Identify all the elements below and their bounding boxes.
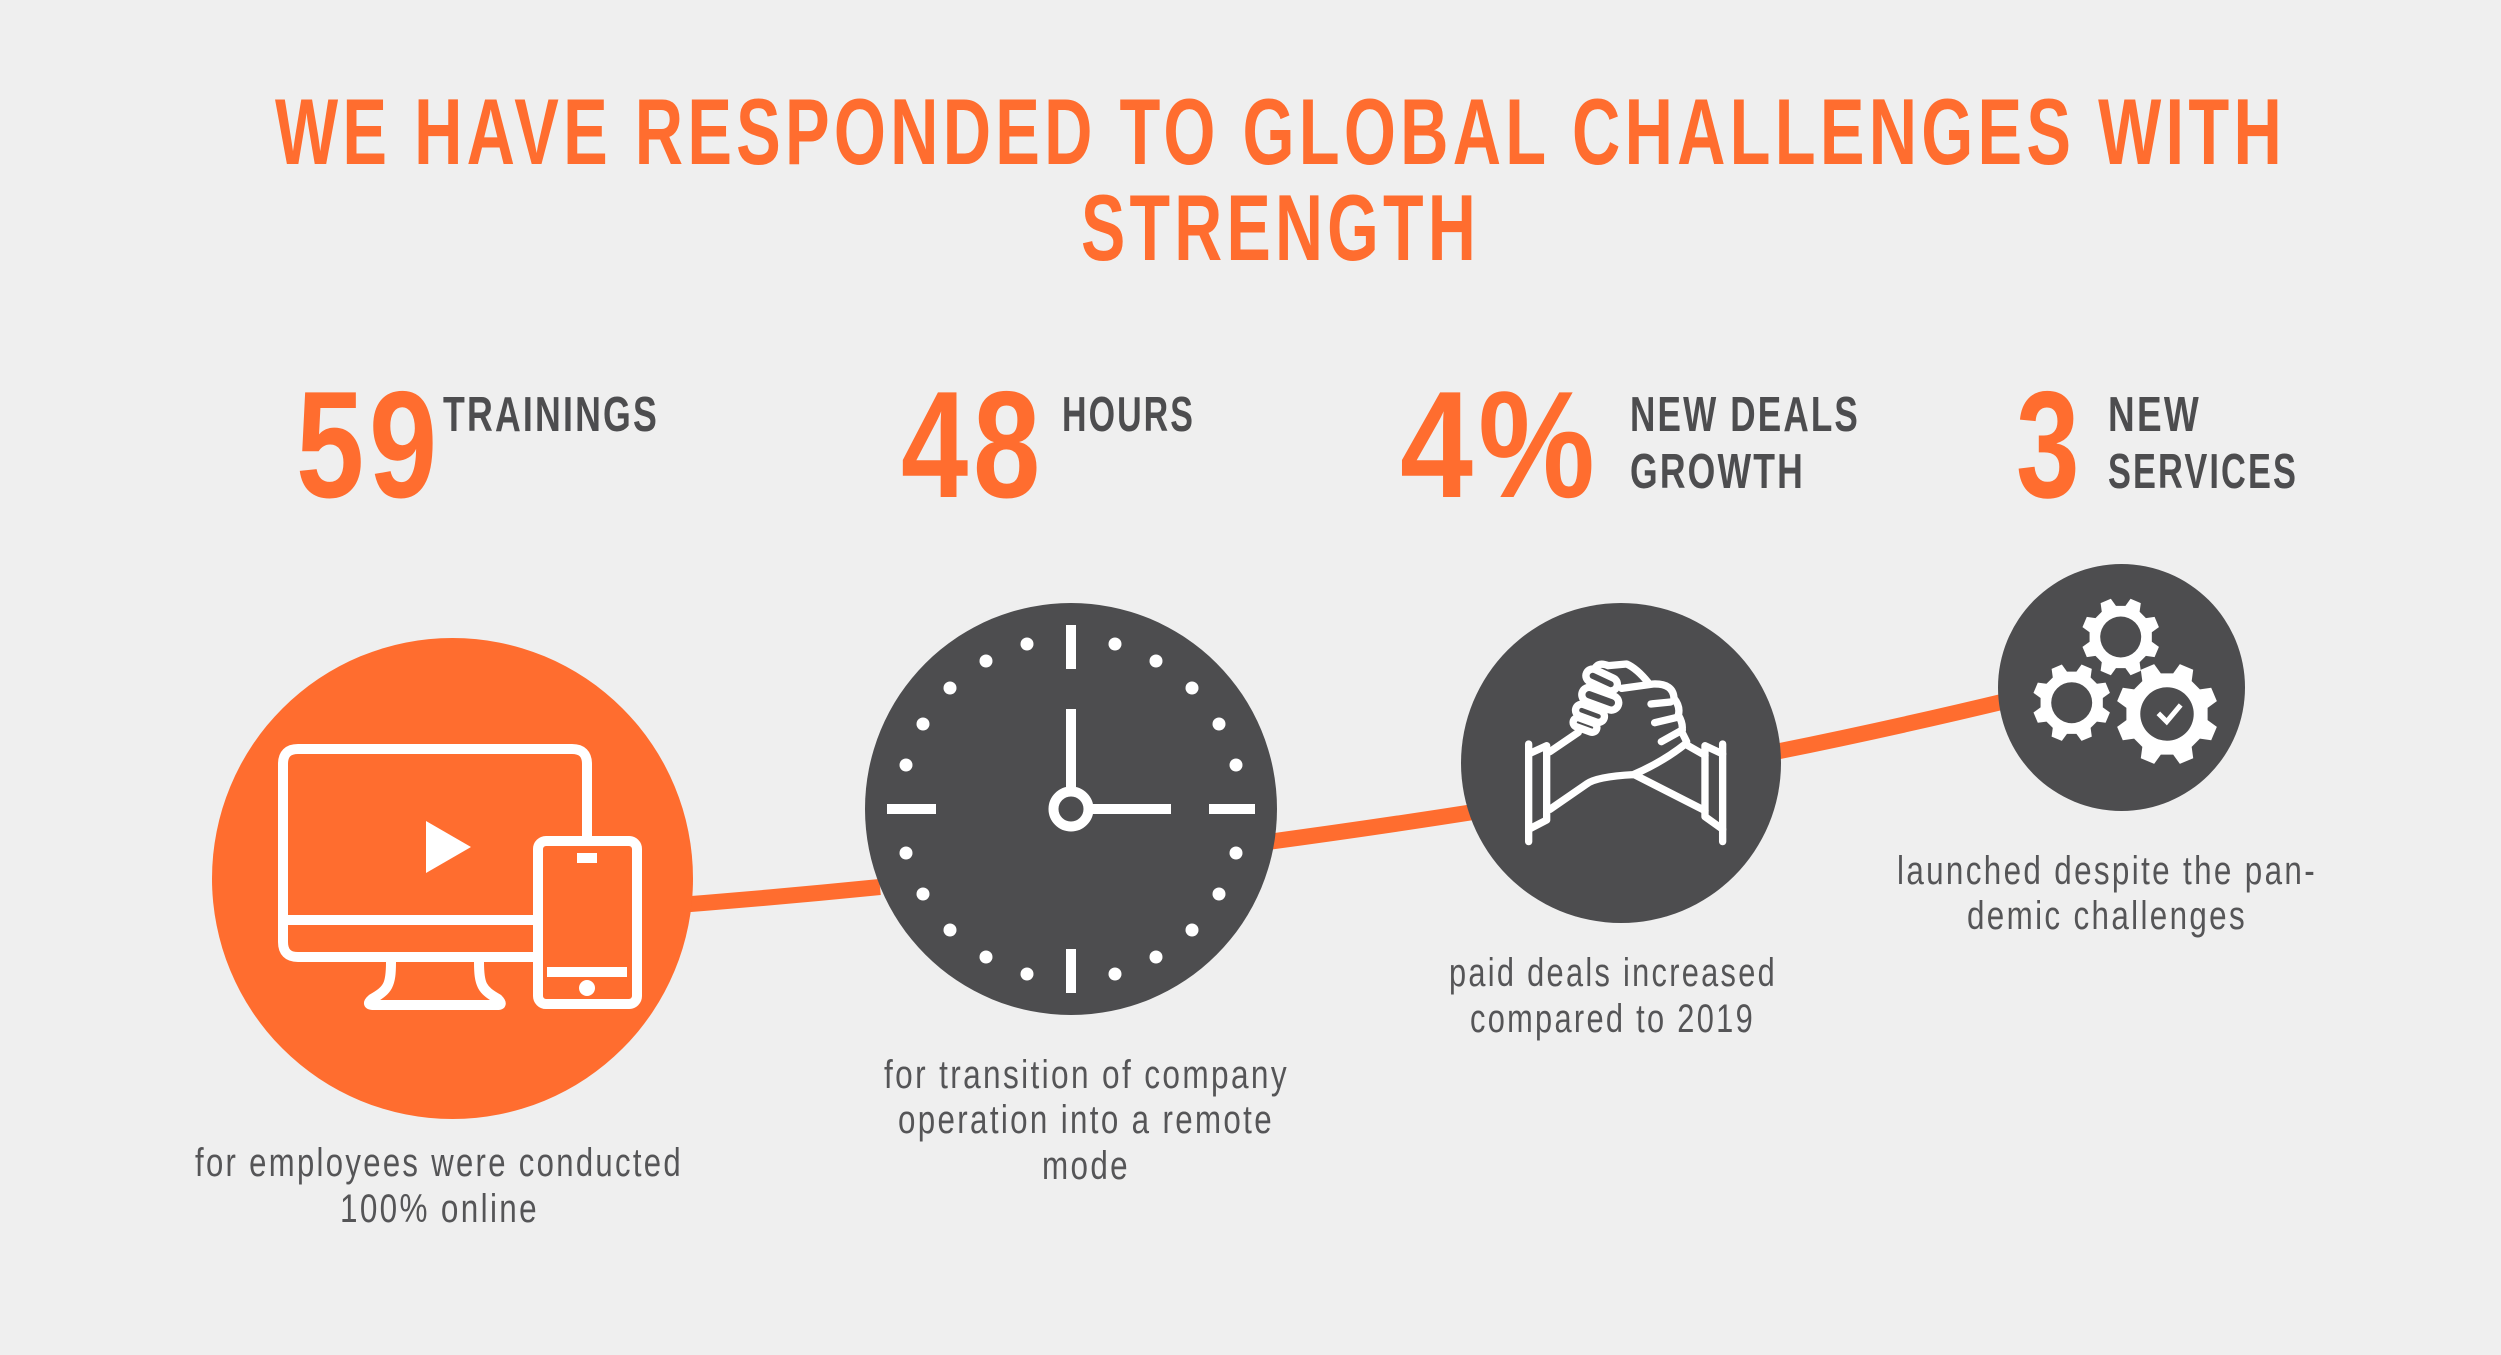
stat label: new services: SERVICES [2108, 445, 2298, 499]
stat label: new deals growth: NEW DEALS [1630, 388, 1860, 442]
description: new services: launched despite the pan- [1897, 849, 2317, 893]
stat label: hours: HOURS [1062, 388, 1195, 442]
description: hours: mode [1042, 1144, 1130, 1188]
icon: monitor and tablet with play button [283, 749, 637, 1005]
icon: clock [887, 625, 1255, 993]
dark circle [1461, 603, 1781, 923]
stat label: new services [2108, 388, 2298, 499]
stat label: new services: NEW [2108, 388, 2201, 442]
description: new services [1897, 849, 2317, 938]
stat number: 48: 48 [901, 360, 1045, 530]
icon: gears with check mark [2033, 599, 2217, 764]
title: STRENGTH [1081, 175, 1480, 280]
description: new deals growth: paid deals increased [1449, 951, 1777, 995]
stat label: new deals growth: GROWTH [1630, 445, 1805, 499]
description: new deals growth: compared to 2019 [1470, 997, 1755, 1041]
description: hours [884, 1053, 1289, 1188]
description: trainings: for employees were conducted [195, 1141, 683, 1185]
panel: hours [865, 360, 1289, 1188]
dark circle [1998, 564, 2245, 811]
description: trainings [195, 1141, 683, 1231]
description: new deals growth [1449, 951, 1777, 1041]
orange connector line [640, 700, 2010, 908]
orange circle [212, 638, 693, 1119]
description: hours: for transition of company [884, 1053, 1289, 1097]
stat label: trainings: TRAININGS [443, 388, 659, 442]
stat number: 4%: 4% [1400, 360, 1600, 530]
icon: clasped hands [1529, 664, 1723, 842]
description: new services: demic challenges [1967, 894, 2247, 938]
panel: trainings [195, 360, 693, 1231]
stat number: 59: 59 [296, 360, 442, 530]
stat number: 3: 3 [2016, 360, 2084, 530]
description: hours: operation into a remote [898, 1098, 1274, 1142]
panel: new deals growth [1400, 360, 1860, 1041]
title [275, 79, 2286, 280]
description: trainings: 100% online [340, 1187, 539, 1231]
panel: new services [1897, 360, 2317, 938]
dark circle [865, 603, 1277, 1015]
stat label: new deals growth [1630, 388, 1860, 499]
